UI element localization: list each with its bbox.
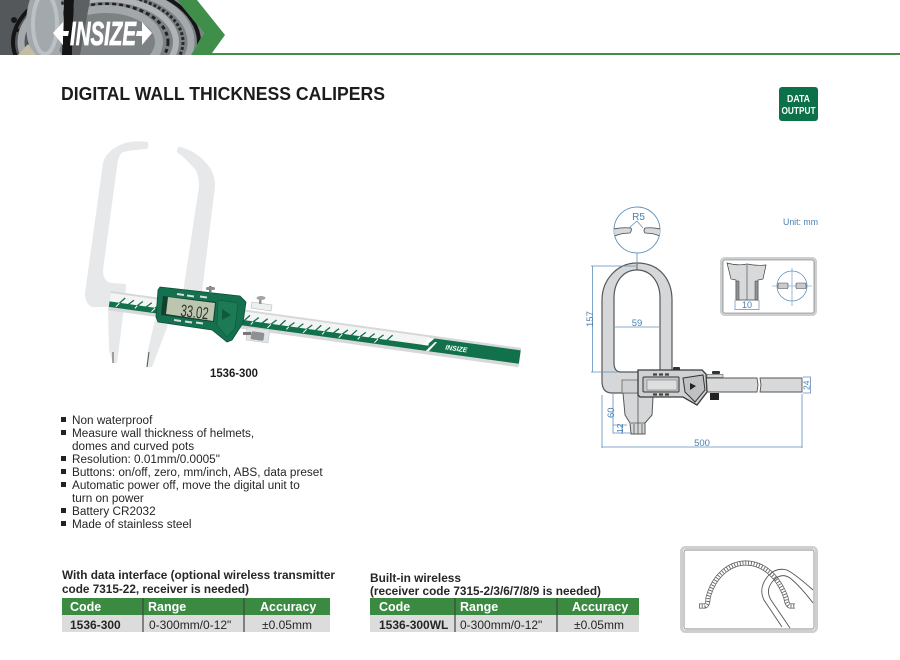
feature list: Non waterproof [72,414,153,427]
ruler brand mark: INSIZE [445,345,468,355]
R5 detail circle [614,206,660,264]
table block: built-in wireless: 1536-300WL [379,618,448,632]
table block: built-in wireless: Code [379,600,410,614]
R5 detail circle: R5 [632,212,645,223]
product photo: digital wall thickness caliper [85,141,521,367]
frame inner opening [614,270,660,372]
caliper frame outline [602,263,672,393]
dimension labels: 24 [802,380,812,390]
feature list: Battery CR2032 [72,505,156,518]
title: DIGITAL WALL THICKNESS CALIPERS [61,84,385,104]
upper and lower left jaw [85,141,148,363]
table rows [370,598,639,615]
table heading [62,568,335,596]
dimension labels [585,311,812,449]
LCD screen: 33.02 [180,301,210,323]
dimension labels: 60 [606,407,617,418]
INSIZE logo: INSIZE [70,15,137,52]
unit buttons [174,294,207,324]
table block: with data interface: ±0.05mm [262,618,312,632]
table heading: (receiver code 7315-2/3/6/7/8/9 is needed) [370,584,601,598]
feature list: turn on power [72,492,144,505]
display unit outline [638,367,723,405]
dimension labels: 157 [585,311,596,327]
table heading: Built-in wireless [370,571,461,585]
table block: with data interface [62,568,335,632]
right jaw [177,147,215,292]
badge: data output: DATA [787,94,810,105]
table block: built-in wireless: ±0.05mm [574,618,624,632]
green chevron [177,0,900,55]
header banner [0,0,900,55]
INSIZE logo [53,15,152,52]
badge: data output [779,87,818,121]
LCD screen [161,296,216,323]
table block: built-in wireless: Range [460,600,498,614]
jaw tip detail inset: 10 [742,300,752,310]
feature list: Resolution: 0.01mm/0.0005" [72,453,220,466]
dimension labels: 59 [632,318,642,329]
feature list [61,414,323,531]
beam [706,378,802,392]
ruler beam [108,291,521,367]
table rows [62,598,330,615]
table heading: With data interface (optional wireless transmitter [62,568,335,582]
table block: with data interface: Code [70,600,101,614]
badge: data output: OUTPUT [782,106,816,117]
locking screw and clamp [206,286,272,343]
lower jaw [623,393,653,434]
table block: with data interface: Range [148,600,186,614]
table heading [370,571,601,598]
digital display unit [156,287,246,342]
dimension labels: 500 [694,438,710,449]
table block: built-in wireless [370,571,639,632]
control panel badge [217,300,238,337]
dimension labels: 12 [615,423,625,433]
feature list: Measure wall thickness of helmets, [72,427,254,440]
usage illustration: measuring a curved wall [682,548,816,632]
table block: built-in wireless: Accuracy [572,600,628,614]
unit note: Unit: mm [783,217,818,227]
table heading: code 7315-22, receiver is needed) [62,582,249,596]
dimension lines [591,266,811,448]
feature list: Automatic power off, move the digital unit to [72,479,300,492]
product code label: 1536-300 [210,366,258,380]
jaw tip detail inset [722,258,816,314]
table block: with data interface: 0-300mm/0-12" [149,618,231,632]
table block: with data interface: 1536-300 [70,618,121,632]
feature list: Made of stainless steel [72,518,192,531]
table block: built-in wireless: 0-300mm/0-12" [460,618,542,632]
technical dimension drawing [585,207,812,449]
feature list: Buttons: on/off, zero, mm/inch, ABS, data preset [72,466,323,479]
table block: with data interface: Accuracy [260,600,316,614]
feature list: domes and curved pots [72,440,194,453]
header photo of machinery [0,0,204,55]
